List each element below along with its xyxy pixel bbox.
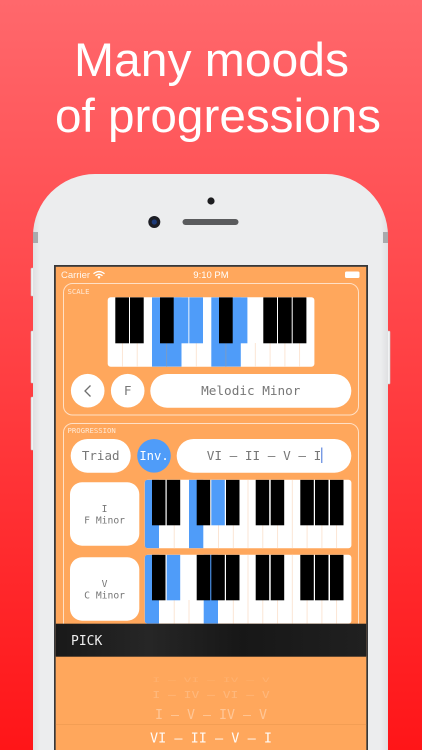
picker rows: VI – II – V – I bbox=[150, 731, 272, 747]
picker rows: I – IV – VI – V bbox=[152, 689, 270, 701]
front sensor bbox=[207, 197, 215, 205]
status bar: 9:10 PM bbox=[193, 270, 229, 281]
key button bbox=[111, 374, 144, 408]
antenna bands bbox=[33, 232, 388, 243]
chord card I bbox=[70, 482, 139, 546]
icon: battery bbox=[345, 272, 360, 278]
pick toolbar bbox=[56, 624, 366, 657]
inversion button bbox=[137, 439, 171, 473]
status bar bbox=[61, 270, 360, 281]
chord card V bbox=[70, 557, 139, 621]
chord card V: C Minor bbox=[84, 590, 125, 602]
icon: wifi bbox=[94, 272, 104, 278]
picker sheet bbox=[56, 624, 366, 750]
triad button bbox=[71, 439, 131, 473]
chord keyboard V bbox=[145, 555, 351, 624]
phone side buttons bbox=[31, 268, 390, 450]
screen bbox=[54, 265, 368, 750]
progression input pill: VI – II – V – I bbox=[207, 448, 321, 463]
phone bbox=[31, 174, 390, 750]
panel: progression bbox=[64, 424, 358, 640]
camera bbox=[148, 216, 160, 228]
chord card I: I bbox=[102, 504, 108, 515]
scale name pill: Melodic Minor bbox=[201, 383, 301, 398]
title: Many moods bbox=[74, 33, 349, 86]
scale keyboard bbox=[108, 297, 314, 367]
pick toolbar: PICK bbox=[71, 634, 102, 649]
scale label: SCALE bbox=[68, 287, 89, 296]
inversion button: Inv. bbox=[139, 449, 169, 463]
chord card V: V bbox=[102, 579, 108, 590]
picker rows bbox=[56, 677, 366, 747]
back button bbox=[71, 374, 104, 408]
panel: scale bbox=[64, 284, 358, 415]
picker rows: I – V – IV – V bbox=[155, 708, 267, 723]
chord keyboard I bbox=[145, 480, 351, 549]
title bbox=[55, 33, 381, 142]
status bar: Carrier bbox=[61, 270, 90, 281]
chord card I: F Minor bbox=[84, 516, 125, 526]
progression label: PROGRESSION bbox=[68, 426, 116, 435]
key button: F bbox=[124, 383, 132, 398]
progression input pill bbox=[177, 439, 351, 473]
phone body bbox=[33, 174, 388, 750]
scale name pill bbox=[150, 374, 351, 408]
triad button: Triad bbox=[82, 448, 120, 463]
picker rows: I – VI – IV – V bbox=[152, 677, 270, 684]
speaker bbox=[182, 219, 238, 225]
title: of progressions bbox=[55, 89, 381, 142]
